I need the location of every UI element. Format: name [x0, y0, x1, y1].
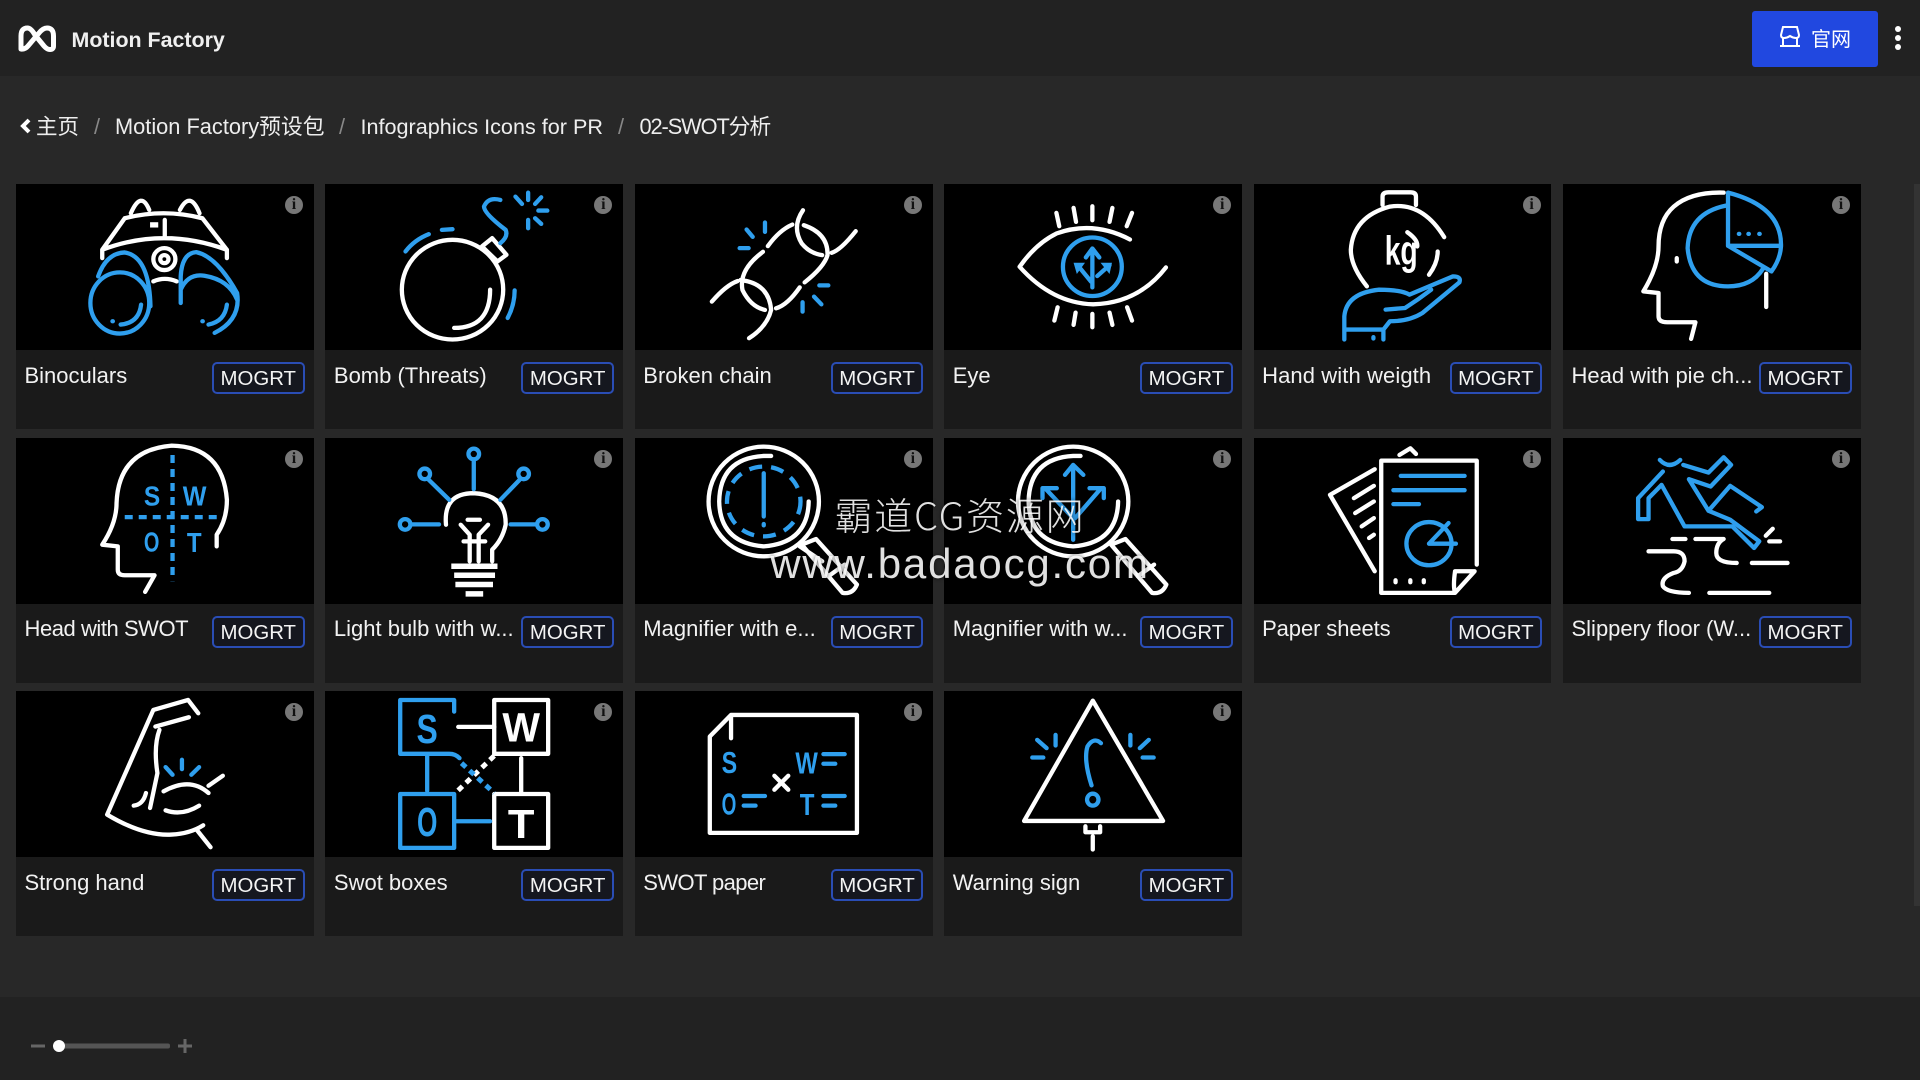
- icon: magnifier with arrows: [944, 438, 1242, 604]
- crumb separator: /: [94, 114, 100, 139]
- label: Warning sign: [953, 870, 1080, 894]
- icon: SWOT boxes: W: [503, 705, 540, 750]
- card: Head with pie chart: [1563, 184, 1861, 429]
- crumb: current: 02-SWOT分析: [640, 114, 770, 139]
- info badge: i: [292, 196, 296, 213]
- label: Paper sheets: [1262, 616, 1391, 641]
- label: Bomb (Threats): [334, 362, 487, 388]
- MOGRT tag: [212, 869, 304, 901]
- info badge: i: [601, 196, 606, 213]
- label: Hand with weigth: [1262, 362, 1431, 388]
- MOGRT tag: [1140, 362, 1233, 394]
- card: Swot boxes: [325, 691, 623, 936]
- icon: head with SWOT: W: [183, 480, 207, 511]
- info badge: i: [601, 703, 606, 720]
- info badge: i: [1529, 450, 1534, 466]
- label: Magnifier with e...: [643, 616, 816, 641]
- info badge: i: [911, 450, 915, 466]
- icon: slippery floor: [1563, 438, 1861, 604]
- card: Broken chain: [635, 184, 933, 429]
- icon: warning sign: [944, 691, 1242, 857]
- info badge: i: [911, 703, 915, 720]
- MOGRT tag: [1450, 616, 1542, 648]
- icon: paper sheets: [1254, 438, 1551, 604]
- info badge: [904, 196, 922, 214]
- info badge: [1523, 450, 1541, 468]
- icon: back chevron: [20, 118, 30, 134]
- label: SWOT paper: [643, 870, 765, 894]
- info badge: [1832, 196, 1850, 214]
- info badge: i: [292, 703, 296, 720]
- card: Bomb: [325, 184, 623, 429]
- MOGRT tag: [1450, 362, 1542, 394]
- MOGRT tag: [1759, 616, 1852, 648]
- icon: SWOT paper: T: [800, 788, 814, 822]
- MOGRT tag: [521, 869, 614, 901]
- info badge: i: [1220, 450, 1224, 466]
- MOGRT tag: [831, 869, 923, 901]
- zoom slider: [31, 1039, 192, 1053]
- info badge: [904, 450, 922, 468]
- icon: bomb: [325, 184, 623, 350]
- icon: head with pie chart: [1563, 184, 1861, 350]
- card: Binoculars: [16, 184, 314, 429]
- info badge: i: [1839, 196, 1843, 213]
- info badge: [904, 703, 922, 721]
- info badge: i: [1220, 703, 1224, 720]
- label: Magnifier with w...: [953, 616, 1128, 641]
- card: Hand with weigth: [1254, 184, 1551, 429]
- watermark title: 霸道CG资源网: [834, 486, 1085, 541]
- button text: 官网: [1811, 29, 1851, 51]
- info badge: [1213, 703, 1231, 721]
- icon: binoculars: [16, 184, 314, 350]
- icon: magnifier with exclamation: [635, 438, 933, 604]
- label: Head with pie ch...: [1572, 362, 1752, 388]
- icon: eye: [944, 184, 1242, 350]
- icon: head with SWOT: O: [144, 526, 159, 557]
- crumb: pack name: Infographics Icons for PR: [360, 114, 603, 139]
- label: Head with SWOT: [24, 616, 188, 641]
- crumb: preset pack: Motion Factory预设包: [115, 114, 325, 139]
- MOGRT tag: MOGRT: [1149, 368, 1224, 390]
- card: Slippery floor: [1563, 438, 1861, 682]
- icon: SWOT boxes: T: [508, 801, 535, 847]
- header bar: [0, 0, 1920, 76]
- crumb: home: 主页: [36, 115, 79, 139]
- icon: light bulb: [325, 438, 623, 604]
- MOGRT tag: MOGRT: [220, 875, 296, 897]
- MOGRT tag: [831, 616, 923, 648]
- MOGRT tag: MOGRT: [220, 368, 296, 390]
- MOGRT tag: MOGRT: [839, 622, 915, 644]
- scrollbar: [1914, 184, 1920, 906]
- info badge: [594, 703, 612, 721]
- info badge: [285, 450, 303, 468]
- label: Broken chain: [643, 362, 772, 388]
- info badge: [1523, 196, 1541, 214]
- info badge: [1213, 450, 1231, 468]
- icon: SWOT paper: O: [721, 788, 736, 821]
- label: Swot boxes: [334, 870, 448, 894]
- MOGRT tag: MOGRT: [839, 368, 915, 390]
- icon: broken chain: [635, 184, 933, 350]
- card: Magnifier with exclamation: [635, 438, 933, 682]
- info badge: [285, 196, 303, 214]
- icon: SWOT paper: [635, 691, 933, 857]
- MOGRT tag: [1140, 869, 1233, 901]
- card: Eye: [944, 184, 1242, 429]
- MOGRT tag: MOGRT: [1767, 622, 1843, 644]
- info badge: i: [911, 196, 915, 213]
- card: SWOT paper: [635, 691, 933, 936]
- info badge: i: [1220, 196, 1224, 213]
- icon: SWOT boxes: [325, 691, 623, 857]
- card: Strong hand: [16, 691, 314, 936]
- icon: head with SWOT: T: [187, 527, 202, 558]
- info badge: [1832, 450, 1850, 468]
- footer bar: [0, 997, 1920, 1080]
- card: Light bulb: [325, 438, 623, 682]
- info badge: [594, 196, 612, 214]
- MOGRT tag: [212, 616, 304, 648]
- MOGRT tag: [212, 362, 304, 394]
- MOGRT tag: MOGRT: [1458, 368, 1534, 390]
- label: Light bulb with w...: [334, 616, 514, 641]
- icon: SWOT paper: S: [721, 746, 737, 780]
- icon: store: [1780, 26, 1800, 47]
- breadcrumb: [20, 114, 770, 139]
- MOGRT tag: [521, 362, 614, 394]
- label: Eye: [953, 362, 991, 388]
- info badge: i: [292, 450, 296, 466]
- MOGRT tag: MOGRT: [530, 875, 605, 897]
- MOGRT tag: [1759, 362, 1852, 394]
- MOGRT tag: MOGRT: [1767, 368, 1843, 390]
- icon: hand with weight: [1254, 184, 1551, 350]
- MOGRT tag: MOGRT: [839, 875, 915, 897]
- icon: more menu: [1895, 26, 1901, 50]
- logo: [18, 26, 56, 52]
- MOGRT tag: MOGRT: [1149, 622, 1224, 644]
- icon: head with SWOT: S: [144, 480, 160, 511]
- label: Slippery floor (W...: [1572, 616, 1751, 641]
- info badge: [285, 703, 303, 721]
- info badge: [1213, 196, 1231, 214]
- watermark url: www.badaocg.com: [770, 540, 1150, 587]
- icon: SWOT boxes: O: [417, 800, 438, 845]
- MOGRT tag: [831, 362, 923, 394]
- info badge: i: [1529, 196, 1534, 213]
- icon: SWOT paper: W: [795, 747, 818, 781]
- icon: strong arm: [16, 691, 314, 857]
- card: Warning sign: [944, 691, 1242, 936]
- icon: SWOT boxes: S: [417, 707, 438, 752]
- website button: [1752, 11, 1878, 67]
- MOGRT tag: MOGRT: [530, 368, 605, 390]
- icon: hand with weight: kg: [1384, 228, 1417, 273]
- MOGRT tag: [1140, 616, 1233, 648]
- MOGRT tag: MOGRT: [220, 622, 296, 644]
- label: Strong hand: [24, 870, 144, 894]
- card: Head with SWOT: [16, 438, 314, 682]
- crumb separator: /: [618, 114, 624, 139]
- brand name: Motion Factory: [72, 28, 225, 52]
- card: Magnifier with arrows: [944, 438, 1242, 682]
- label: Binoculars: [24, 362, 127, 388]
- info badge: [594, 450, 612, 468]
- card: Paper sheets: [1254, 438, 1551, 682]
- MOGRT tag: [521, 616, 614, 648]
- crumb separator: /: [339, 114, 345, 139]
- icon: head with SWOT: [16, 438, 314, 604]
- info badge: i: [1839, 450, 1843, 466]
- MOGRT tag: MOGRT: [1458, 622, 1534, 644]
- MOGRT tag: MOGRT: [530, 622, 605, 644]
- info badge: i: [601, 450, 606, 466]
- MOGRT tag: MOGRT: [1149, 875, 1224, 897]
- watermark: [768, 486, 1150, 587]
